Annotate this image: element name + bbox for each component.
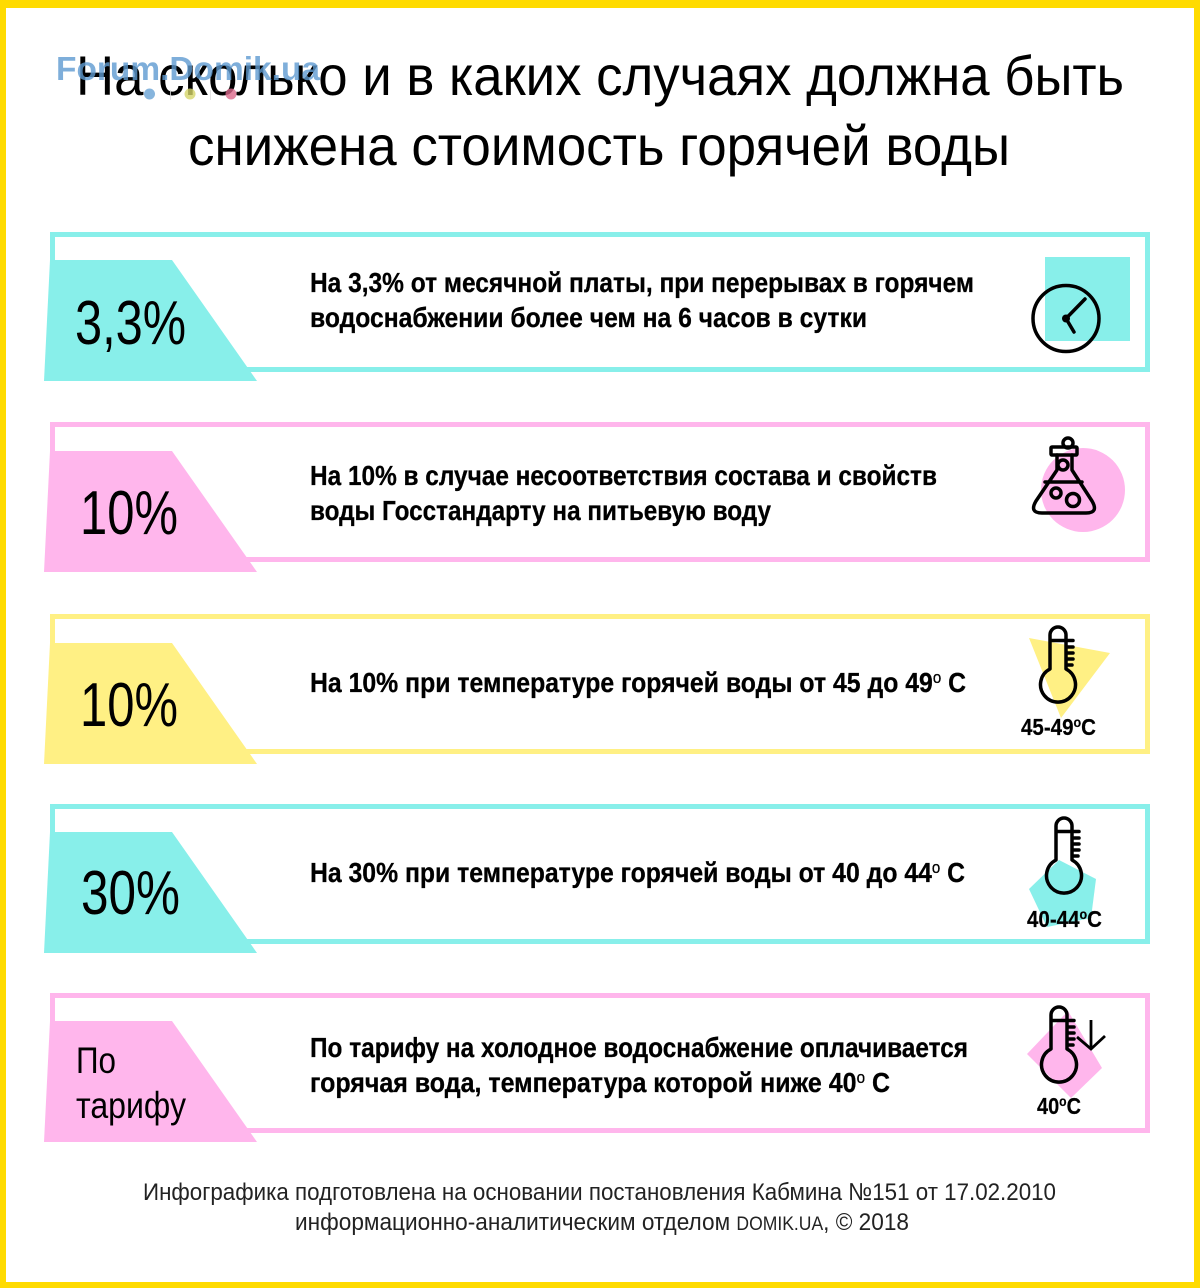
text: water composition description [310,460,937,526]
text: 40-44 description: о [932,858,940,877]
text: 45-49 description: На 10% при температуре горячей воды от 45 до 49 [310,667,1013,698]
badge: 30% [44,832,257,953]
badge: tariff: тарифу [76,1085,186,1126]
badge: tariff: По [76,1040,116,1081]
text: tariff description [310,1032,968,1098]
text: 40-44 description: С [940,857,965,888]
icon: thermometer 45-49: 45-49 [1021,714,1080,740]
title [76,44,1124,177]
icon: thermometer with arrow [1027,1007,1105,1119]
text: tariff description: По тарифу на холодное водоснабжение оплачивается [310,1032,968,1063]
icon: thermometer 40-44: C [1087,906,1102,932]
text: 45-49 description: о [933,668,941,687]
text: water composition description: На 10% в случае несоответствия состава и свойств [310,460,937,491]
title: снижена стоимость горячей воды [188,114,1010,177]
text: tariff description: С [865,1067,890,1098]
icon: thermometer with arrow: о [1059,1093,1067,1109]
footer note: Инфографика подготовлена на основании постановления Кабмина №151 от 17.02.2010 [143,1179,1056,1206]
badge: 10%: 10% [80,671,178,740]
text: 3,3% description: водоснабжении более чем на 6 часов в сутки [310,302,867,333]
watermark: Forum.Domik.ua [56,50,321,87]
panel: 10% water composition [44,424,1148,572]
text: 3,3% description: На 3,3% от месячной платы, при перерывах в горячем [310,267,974,298]
text: 40-44 description: На 30% при температуре горячей воды от 40 до 44 [310,857,1013,888]
badge: 30%: 30% [81,859,180,928]
icon: thermometer with arrow: 40 [1037,1093,1063,1119]
icon: thermometer 40-44: о [1080,906,1087,922]
text: 3,3% description [310,267,974,333]
icon: thermometer 45-49 [1021,627,1110,740]
badge: 10% [44,451,257,572]
icon: thermometer 40-44 [1027,818,1102,932]
title: На сколько и в каких случаях должна быть [76,44,1124,107]
text: water composition description: воды Госстандарту на питьевую воду [310,495,771,526]
panel: 30% [44,806,1148,953]
text: tariff description: о [857,1068,865,1087]
footer note: информационно-аналитическим отделом DOMIK.UA, © 2018 [295,1209,909,1236]
text: 45-49 description: С [941,667,966,698]
icon: thermometer 45-49: C [1081,714,1096,740]
badge: tariff [44,1021,257,1142]
badge: 10% [44,643,257,764]
icon: thermometer 40-44: 40-44 [1027,906,1086,932]
text: tariff description: горячая вода, температура которой ниже 40 [310,1067,923,1098]
icon: thermometer 45-49: о [1074,714,1081,730]
panel: 3,3% [44,234,1148,381]
badge: 3,3% [44,260,257,381]
icon: thermometer with arrow: C [1067,1093,1081,1119]
footer note [143,1179,1056,1236]
panel: 10% temperature [44,616,1148,764]
icon: flask [1034,438,1125,532]
badge: 3,3%: 3,3% [75,289,186,358]
panel: tariff [44,996,1148,1142]
badge: 10%: 10% [80,479,178,548]
icon: clock [1033,257,1130,352]
